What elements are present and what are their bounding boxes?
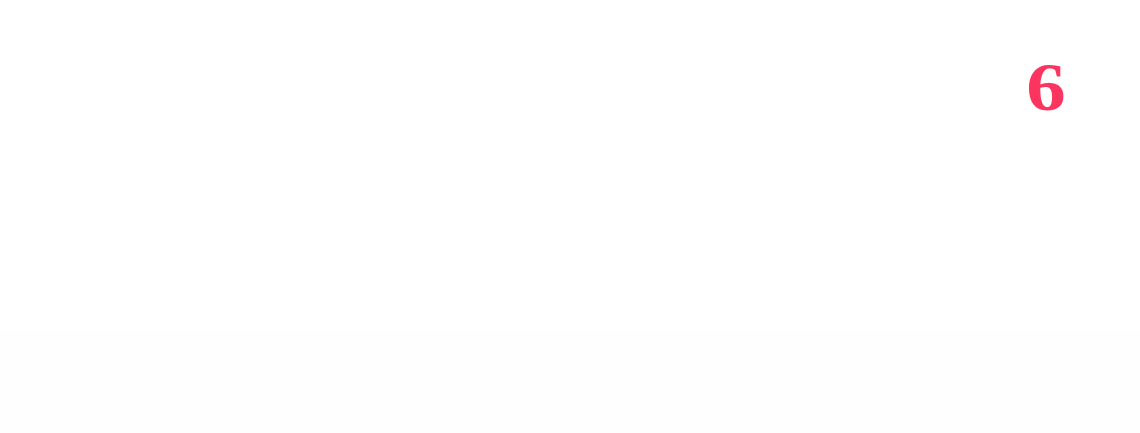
- big number: 6: 6: [1026, 49, 1066, 125]
